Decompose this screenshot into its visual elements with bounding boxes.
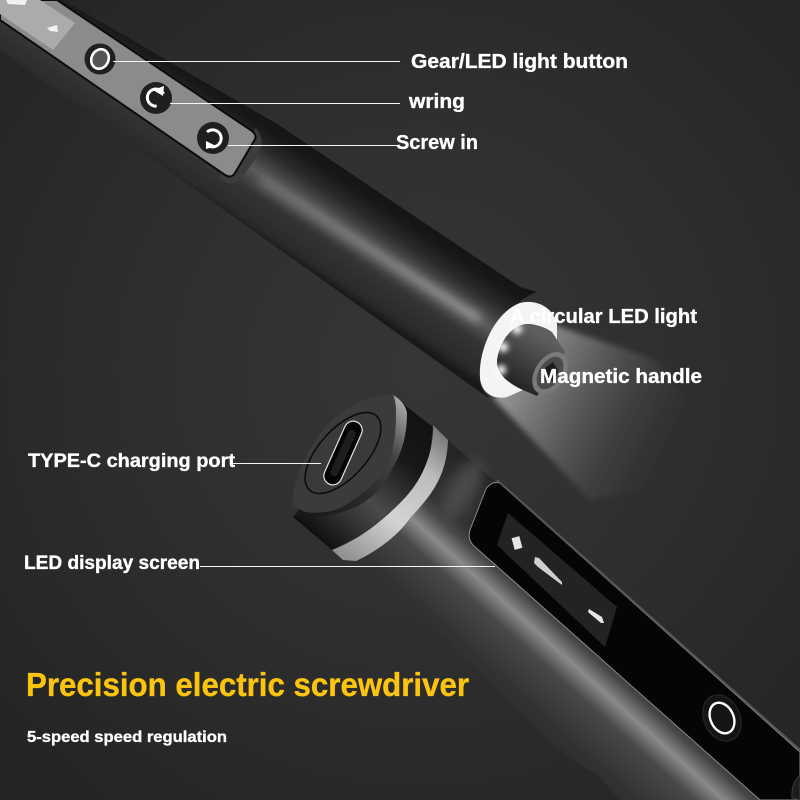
leader: wring (170, 102, 400, 104)
display shoulder (433, 454, 491, 526)
silver ring (332, 425, 448, 561)
lower screwdriver body (360, 440, 800, 800)
body highlight (260, 180, 480, 320)
label: screw in: Screw in (396, 132, 478, 154)
LED glow spots (496, 324, 522, 375)
LED button (696, 689, 748, 747)
battery icon (512, 536, 522, 550)
button panel (0, 0, 256, 177)
upper screwdriver body (0, 0, 537, 397)
panel collar (218, 128, 262, 183)
leader: display (200, 566, 495, 568)
lower screwdriver cap (292, 395, 448, 561)
light beam from LED ring (493, 325, 740, 500)
small display window (0, 0, 75, 50)
label: type-c charging port: TYPE-C charging port (28, 451, 236, 472)
upper screwdriver (0, 0, 575, 400)
label: LED display screen: LED display screen (24, 553, 200, 574)
port recess (292, 400, 394, 506)
title: Precision electric screwdriver (26, 666, 469, 703)
LED display panel (469, 480, 800, 800)
button: screw in (197, 122, 229, 154)
label: circular LED light: A circular LED light (510, 306, 697, 328)
leader: screw in (228, 144, 397, 146)
cap side (293, 395, 433, 550)
display glass (469, 482, 800, 800)
leader: gear / LED (113, 60, 400, 62)
top edge of body (497, 480, 800, 750)
button: gear / LED (84, 44, 116, 74)
inner screen (497, 513, 617, 647)
label: magnetic handle: Magnetic handle (540, 366, 702, 388)
label: wring: wring (408, 91, 465, 113)
magnetic tip face (525, 346, 575, 400)
label: gear / LED light button: Gear/LED light button (411, 51, 628, 73)
small tool icon (588, 609, 604, 623)
magnetic tip shaft (497, 324, 565, 396)
leader: type-c (233, 462, 321, 464)
subtitle: 5-speed speed regulation (27, 729, 227, 746)
cap chamfer (293, 395, 407, 517)
display icons (6, 0, 58, 32)
screwdriver bit icon (534, 557, 562, 585)
second button (792, 775, 800, 800)
button: wring (140, 82, 172, 114)
type-c port (321, 418, 365, 488)
circular LED light (480, 302, 557, 398)
cap end face (293, 395, 396, 513)
